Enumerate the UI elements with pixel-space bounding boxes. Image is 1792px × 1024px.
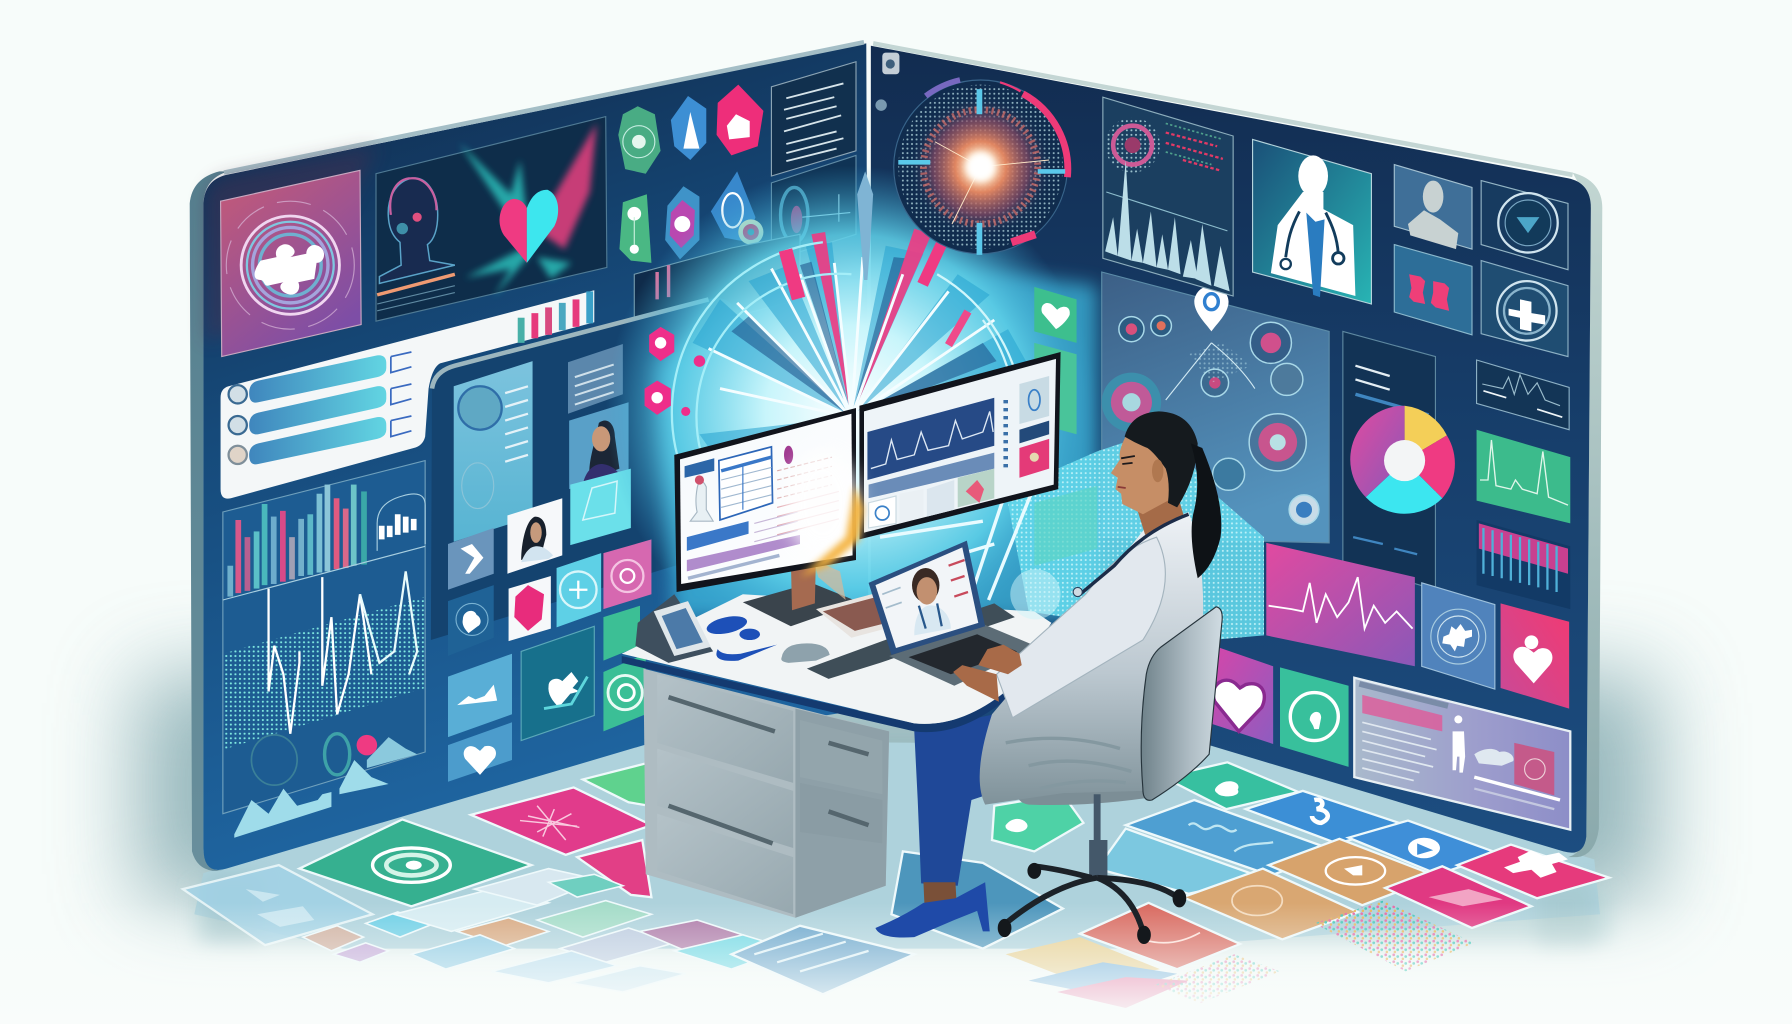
chair casters: [998, 863, 1186, 944]
round scan: [325, 734, 350, 775]
ponytail: [1191, 443, 1221, 578]
tile: heart blue: [448, 722, 512, 782]
panel: cells network: [1102, 272, 1329, 543]
tile: portrait doctor: [507, 498, 562, 574]
cabinet: [643, 669, 889, 918]
radial data fan: [645, 171, 1046, 486]
panel: purple ECG: [1266, 543, 1415, 666]
stethoscope: [1073, 514, 1189, 597]
tile: pink network: [471, 787, 651, 855]
panel: pie chart: [1343, 331, 1455, 590]
hair: [1125, 411, 1198, 507]
panel: puzzle target: [1422, 583, 1495, 689]
panel: puzzle emblem: [221, 170, 361, 357]
icon: rings: [226, 201, 354, 329]
lower tile grid: [448, 539, 651, 782]
icon: green hexagon: [618, 106, 661, 174]
hexagon icon grid: [618, 85, 763, 263]
rear keyboard: [816, 592, 886, 638]
tile: portrait: [569, 402, 629, 489]
neck: [1134, 486, 1184, 535]
panel: clinical report: [1354, 678, 1570, 830]
panel: white bars list: [221, 290, 594, 499]
scope arcs: [1023, 94, 1068, 177]
shoes: [875, 882, 990, 938]
scanner device: [635, 594, 713, 663]
icon: pink splash: [535, 123, 597, 249]
blue figure: [857, 171, 873, 280]
tile: cyan target: [557, 553, 601, 627]
tile: green small: [603, 606, 640, 661]
panel: front raised dashboard: [431, 298, 731, 640]
tile: pink device: [1385, 866, 1531, 928]
icon: pink hexagon: [717, 85, 763, 155]
wall bevel left: [190, 171, 229, 871]
tile: yellow pink stripes: [1006, 937, 1189, 1008]
floor tiles left: [183, 763, 789, 992]
tile: green target: [299, 819, 531, 906]
panel: patient hood: [1394, 165, 1472, 249]
floor tiles right: [731, 762, 1609, 1008]
desk accessories: [635, 592, 1015, 679]
bar chart: [227, 485, 367, 597]
ECG trace: [269, 589, 299, 734]
tile: green target: [603, 654, 646, 731]
cabinet handles: [669, 697, 869, 843]
dot field: [223, 597, 425, 750]
wall panel left: [203, 43, 869, 870]
panel: head and heart: [376, 117, 607, 321]
monitor seam glow: [786, 451, 864, 577]
central glow burst: [606, 166, 1097, 657]
wall top edge right: [873, 43, 1573, 175]
floor reflection of the wall: [206, 874, 1594, 949]
tile group: small cards: [303, 869, 789, 992]
right monitor: [859, 352, 1061, 539]
ear: [1152, 459, 1163, 482]
spikes: [1105, 160, 1230, 291]
pin marker: [1194, 286, 1229, 331]
tile: salmon face: [1080, 903, 1240, 969]
monitor stand: [743, 554, 859, 626]
laptop base: [889, 624, 1038, 686]
small corner widget: [875, 53, 899, 111]
wall bevel right: [1568, 173, 1602, 857]
panel: green target: [1280, 667, 1349, 767]
panel: text list: [771, 62, 856, 176]
panel: small waveform: [1477, 360, 1569, 430]
glass sphere on desk: [1010, 569, 1061, 619]
desk: [622, 594, 1051, 732]
clinician: [953, 411, 1221, 805]
laptop: [869, 541, 1038, 686]
tile: blue glyph: [1246, 791, 1406, 843]
cabinet drawers: [657, 674, 882, 914]
tile: tan stamp: [1183, 869, 1358, 939]
wall top edge left: [224, 42, 864, 173]
skull scan: [251, 735, 297, 785]
row markers: [391, 352, 411, 437]
tile: pink corner: [577, 840, 651, 897]
tile: scattered colored dots: [1314, 901, 1474, 971]
tile: light green: [583, 763, 649, 806]
chair pole: [1089, 794, 1107, 880]
tile: red cross: [1457, 845, 1609, 898]
panel: pink kidneys: [1394, 245, 1472, 335]
tile: tan bottle: [1269, 839, 1438, 905]
icon: green tall hexagon: [619, 194, 651, 263]
blue accessories: [705, 613, 777, 661]
tile: pale blue form: [183, 865, 373, 945]
dock bar: [807, 603, 1015, 679]
tile: confetti small: [1154, 954, 1280, 1003]
cabinet body: [643, 669, 889, 918]
cell markers: [1119, 315, 1319, 525]
coat body: [980, 512, 1203, 805]
mouth: [1118, 487, 1126, 488]
peak charts: [234, 737, 417, 838]
body figure: [1453, 715, 1465, 773]
fade out of floor reflection: [0, 903, 1792, 1024]
tile: ripple water: [891, 851, 1063, 949]
panel: plus scope: [1481, 261, 1568, 357]
icon: heart: [500, 190, 558, 263]
panel: green ECG: [1477, 430, 1570, 523]
mini house chart: [377, 494, 425, 551]
legs: [914, 714, 1006, 886]
tile: blue wave text: [1126, 800, 1337, 875]
right wall: [871, 43, 1602, 857]
tile: chevron: [448, 528, 494, 590]
chair back: [1141, 607, 1222, 800]
tile: dark teal heart: [521, 626, 594, 741]
left monitor: [674, 408, 856, 592]
tile: pink target: [603, 539, 651, 609]
tile: text panel: [568, 344, 623, 414]
floor surface: [194, 741, 1600, 949]
tile: cyan sketch: [570, 469, 631, 545]
wall tint top-left: [206, 146, 377, 343]
dual monitors: [674, 352, 1061, 626]
eye and brow: [1121, 456, 1135, 464]
tile: striped report: [731, 926, 914, 994]
panel: green heart tile: [1034, 287, 1077, 434]
mouse: [781, 643, 830, 663]
figure: [1271, 155, 1355, 297]
chair base: [998, 775, 1186, 944]
chair seat: [1017, 775, 1149, 805]
pink hexagon nodes: [645, 327, 705, 416]
icon: AI head: [377, 178, 455, 311]
icon: puzzle piece: [255, 244, 324, 295]
legs and shoes: [875, 714, 1006, 938]
chair star base: [1006, 866, 1177, 931]
panel: ear scan: [771, 155, 856, 261]
hands: [953, 645, 1022, 702]
bar rows: [249, 355, 386, 464]
tile: mountains: [448, 654, 512, 737]
pink dot: [357, 735, 377, 755]
panel: cyan dot field behind clinician: [880, 429, 1264, 640]
coat arm: [997, 537, 1165, 718]
tile: green cross partial: [992, 794, 1083, 851]
tile: green flower: [1163, 762, 1298, 809]
panel: bar chart and ECG: [223, 461, 425, 838]
icon: blue face hexagon: [711, 171, 763, 245]
wall panel right: [871, 46, 1591, 853]
laptop screen: [869, 541, 985, 655]
scope markers: [977, 89, 982, 255]
panel: heart scope: [1481, 181, 1568, 270]
row icons: [229, 385, 247, 464]
icon: blue hexagon: [671, 96, 706, 160]
panel: small bar fragment: [634, 234, 800, 343]
tile: pale blue ripple: [1097, 829, 1263, 894]
panel: colored stripes: [1477, 520, 1570, 609]
red data rows: [1166, 133, 1223, 170]
panel: doctor silhouette: [1253, 139, 1371, 304]
tile: light blue dial: [454, 361, 533, 542]
radial sun scope: [894, 80, 1068, 255]
mini bar chart: [521, 291, 590, 343]
icon: blue purple hexagon: [665, 186, 699, 259]
tile: pink hexagon on white: [509, 576, 551, 641]
laptop portrait: [882, 560, 968, 635]
pie slices: [1350, 406, 1455, 514]
link lines: [1166, 343, 1255, 400]
panel: purple heart: [1207, 643, 1273, 744]
desk edge: [622, 656, 1006, 732]
face: [1111, 432, 1177, 514]
screen content right: [867, 376, 1049, 528]
icon: splash behind heart: [459, 143, 571, 297]
panel: spectrum chart: [1103, 97, 1233, 296]
desk top: [622, 594, 1051, 724]
tile: glyph: [448, 585, 494, 656]
left wall: [190, 42, 869, 871]
chart divider: [223, 546, 425, 600]
tile: blue dial: [1349, 821, 1499, 874]
scope dial: [894, 80, 1067, 254]
panel: pink heart: [1501, 603, 1569, 709]
screen content left: [685, 446, 839, 578]
